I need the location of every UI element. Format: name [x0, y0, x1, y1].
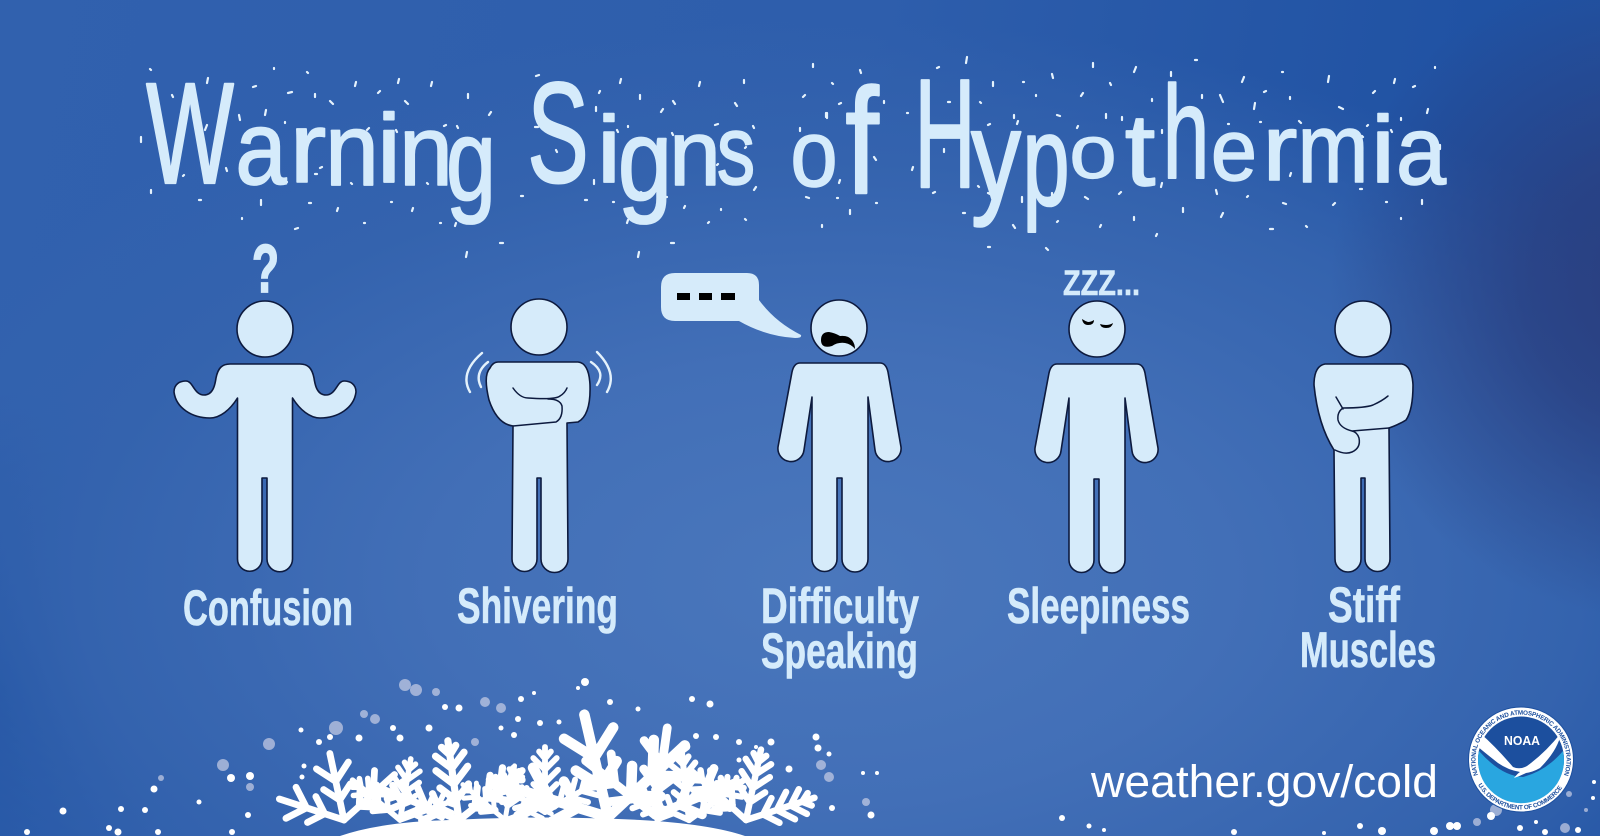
title: r [1263, 96, 1297, 201]
snow specks around title [141, 57, 1440, 257]
head [1335, 301, 1391, 357]
figure: shivering [466, 299, 611, 572]
label: stiff muscles [1300, 577, 1436, 678]
noaa logo: NOAA [1504, 733, 1541, 748]
label: stiff muscles: Stiff [1328, 577, 1400, 633]
title: g [446, 95, 496, 225]
body [1314, 364, 1413, 572]
title [146, 48, 1447, 233]
label: difficulty speaking [761, 578, 919, 679]
title: f [845, 57, 879, 225]
mouth [821, 332, 855, 349]
title: s [717, 95, 755, 205]
title: n [325, 92, 379, 208]
body with raised arms [174, 364, 356, 572]
arm lines [513, 388, 567, 426]
title: p [1022, 89, 1070, 233]
title: i [597, 96, 621, 202]
body [778, 363, 901, 572]
title: a [235, 89, 287, 206]
speech bubble [661, 273, 801, 338]
label: stiff muscles: Muscles [1300, 622, 1436, 678]
title: o [1069, 110, 1117, 194]
title: a [1396, 96, 1447, 205]
label: difficulty speaking: Difficulty [761, 578, 919, 634]
title: H [914, 48, 976, 220]
snow dots, white [24, 678, 1596, 836]
head [511, 299, 567, 355]
head [811, 300, 867, 356]
noaa logo [1468, 706, 1574, 812]
website url: weather.gov/cold [1090, 756, 1438, 807]
figure: confusion [174, 231, 356, 572]
title: r [290, 93, 326, 204]
title: y [971, 85, 1021, 228]
noaa logo: NATIONAL OCEANIC AND ATMOSPHERIC ADMINISTRATION [1471, 710, 1571, 776]
title: i [1371, 96, 1395, 202]
dashes [677, 293, 735, 300]
title: n [669, 101, 721, 205]
label: shivering: Shivering [457, 578, 618, 634]
noaa logo: U.S. DEPARTMENT OF COMMERCE [1478, 782, 1562, 810]
body with crossed arms [486, 362, 590, 572]
title: i [377, 94, 401, 203]
title: h [1163, 60, 1209, 207]
head [1069, 301, 1125, 357]
title: W [146, 52, 234, 214]
figure: stiff muscles [1314, 301, 1413, 572]
snowflake pile [264, 691, 829, 836]
eyes [1082, 319, 1113, 328]
figure: sleepiness [1035, 264, 1158, 573]
title: S [527, 54, 589, 213]
head [237, 301, 293, 357]
label: sleepiness: Sleepiness [1007, 578, 1190, 634]
title: g [618, 95, 672, 225]
title: n [399, 95, 453, 206]
title: m [1298, 94, 1368, 203]
label: difficulty speaking: Speaking [761, 623, 918, 679]
arm lines [1335, 396, 1389, 453]
body [1035, 364, 1158, 573]
zzz text: ZZZ... [1063, 264, 1140, 303]
title: e [1211, 102, 1257, 199]
question mark: ? [252, 231, 279, 307]
shiver marks [466, 352, 611, 392]
snow dots, pale [158, 679, 1588, 833]
label: confusion: Confusion [183, 580, 353, 636]
title: o [790, 101, 838, 207]
title: t [1125, 94, 1155, 207]
figure: difficulty speaking [661, 273, 901, 572]
